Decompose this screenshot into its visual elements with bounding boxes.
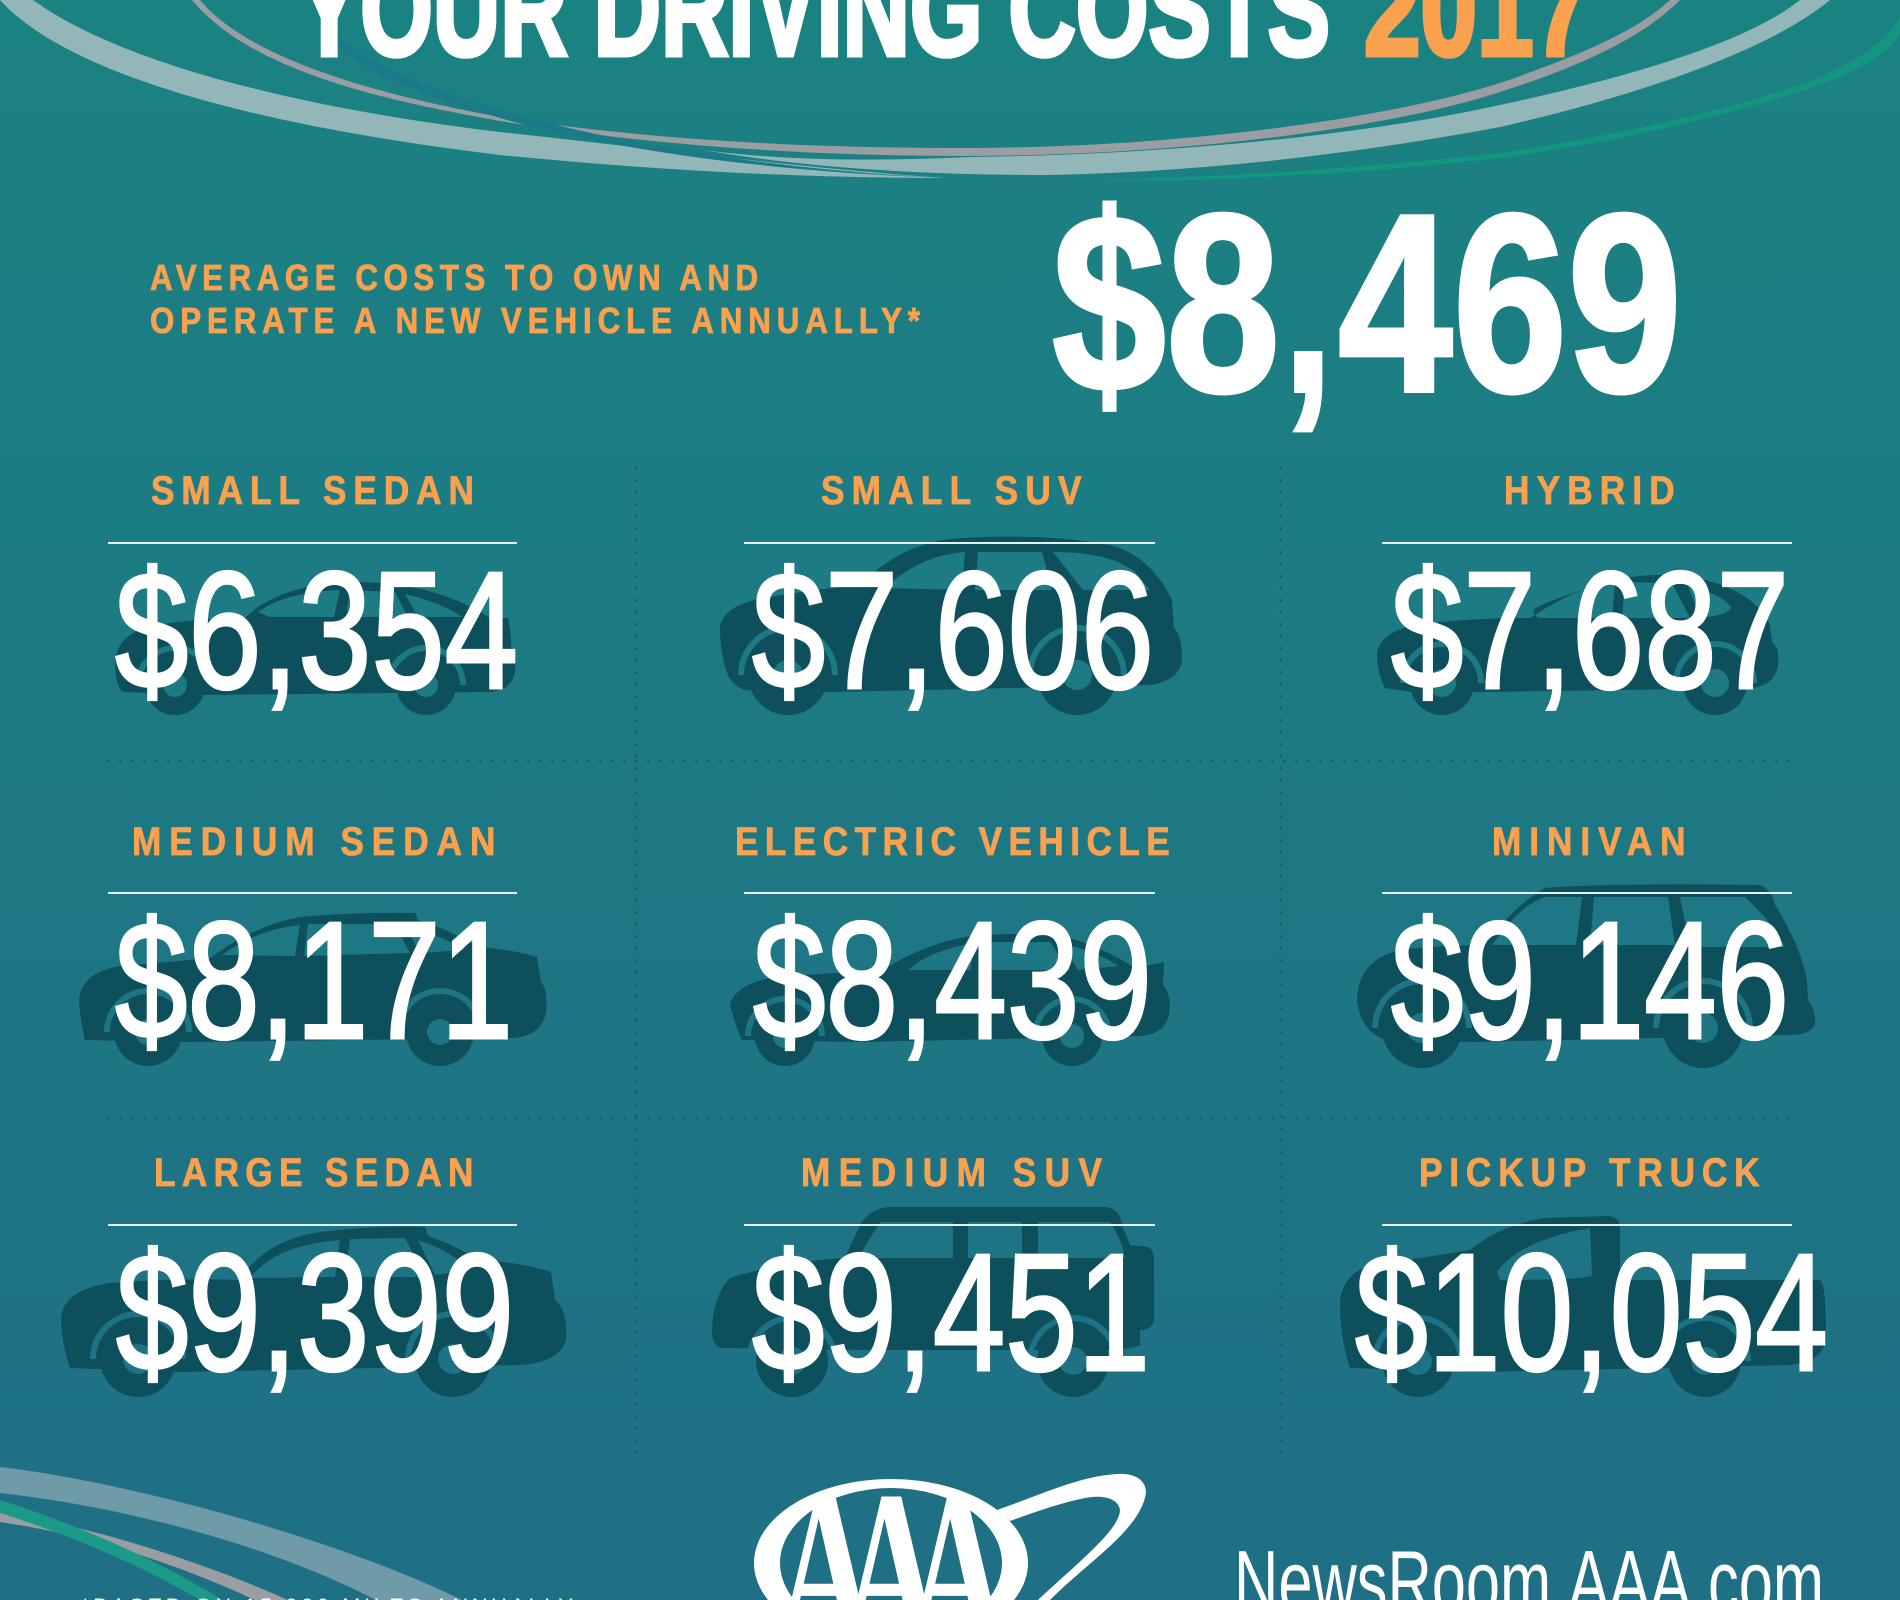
price: $7,606: [752, 538, 1154, 724]
average cost description: [150, 258, 921, 342]
grid dividers: [107, 467, 1793, 1462]
price: $9,146: [1391, 888, 1789, 1074]
icon: electric vehicle silhouette: [730, 934, 1170, 1066]
panel: small suv: [720, 468, 1182, 724]
icon: suv silhouette: [720, 537, 1182, 715]
label: MEDIUM SUV: [801, 1150, 1102, 1194]
icon: minivan silhouette: [1357, 884, 1815, 1068]
average cost figure: ,: [1283, 161, 1333, 445]
panel: large sedan: [61, 1150, 566, 1406]
panel: electric vehicle: [730, 819, 1170, 1074]
average cost figure: 469: [1338, 161, 1682, 445]
average cost description: OPERATE A NEW VEHICLE ANNUALLY*: [150, 301, 921, 342]
icon: sedan silhouette: [115, 582, 516, 715]
rule: [1382, 892, 1792, 894]
average cost description: AVERAGE COSTS TO OWN AND: [150, 258, 758, 299]
average cost figure: [1052, 161, 1682, 445]
panel: hybrid: [1377, 468, 1792, 724]
rule: [108, 542, 517, 544]
rule: [1382, 542, 1792, 544]
label: PICKUP TRUCK: [1419, 1150, 1760, 1194]
icon: medium sedan silhouette: [79, 913, 546, 1066]
label: HYBRID: [1504, 468, 1675, 512]
price: $8,439: [753, 888, 1152, 1074]
price: $8,171: [115, 888, 513, 1074]
logo: AAA: [754, 1474, 1146, 1600]
decorative swoosh arcs at top: [0, 0, 1900, 180]
icon: large sedan silhouette: [61, 1227, 566, 1397]
decorative swoosh arcs at bottom left: [0, 1467, 462, 1600]
rule: [108, 1224, 517, 1226]
panel: pickup truck: [1340, 1150, 1828, 1406]
price: $7,687: [1391, 538, 1789, 724]
label: MEDIUM SEDAN: [132, 819, 495, 863]
label: LARGE SEDAN: [154, 1150, 473, 1194]
panel: minivan: [1357, 819, 1815, 1074]
panel: medium sedan: [79, 819, 546, 1074]
price: $9,399: [116, 1220, 514, 1406]
rule: [108, 892, 517, 894]
price: $6,354: [115, 538, 518, 724]
icon: medium suv silhouette: [712, 1207, 1154, 1397]
panel: small sedan: [108, 468, 518, 724]
label: MINIVAN: [1492, 819, 1686, 863]
rule: [1382, 1224, 1792, 1226]
label: SMALL SEDAN: [151, 468, 474, 512]
rule: [744, 1224, 1155, 1226]
label: SMALL SUV: [821, 468, 1081, 512]
panel: medium suv: [712, 1150, 1155, 1406]
icon: pickup truck silhouette: [1340, 1216, 1826, 1397]
label: ELECTRIC VEHICLE: [735, 819, 1170, 863]
icon: hybrid silhouette: [1377, 575, 1778, 715]
price: $9,451: [752, 1220, 1150, 1406]
rule: [744, 542, 1155, 544]
average cost figure: $8: [1052, 161, 1280, 445]
rule: [744, 892, 1155, 894]
